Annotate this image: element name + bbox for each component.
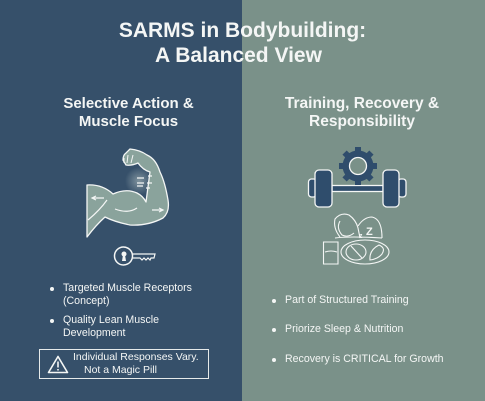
heading: left: Selective Action & [63,95,194,112]
bullet: lean muscle: Quality Lean Muscle [63,314,159,326]
title: A Balanced View [155,44,322,67]
bullet: receptors: Targeted Muscle Receptors [63,282,192,294]
icon: sleep and nutrition: z [359,233,363,240]
title [119,19,366,67]
icon: warning triangle [48,356,68,374]
bullet: sleep: Priorize Sleep & Nutrition [285,323,403,335]
bullet: receptors: (Concept) [63,295,110,307]
bullet: lean muscle [50,314,159,339]
icon: flexed arm [86,148,170,238]
callout: warning [39,349,209,379]
icon: key [114,246,156,266]
bullet list: right [272,294,444,365]
callout text: Not a Magic Pill [84,364,157,376]
heading: left: Muscle Focus [79,113,178,130]
panel: left background [0,0,242,401]
bullet list: left [50,282,192,339]
callout text [73,351,199,376]
heading: right [285,95,439,130]
title: SARMS in Bodybuilding: [119,19,366,42]
callout text: Individual Responses Vary. [73,351,199,363]
bullet: recovery: Recovery is CRITICAL for Growth [285,353,444,365]
icon: barbell with gear [308,147,407,208]
icon: sleep and nutrition [322,214,390,264]
heading: left [63,95,194,130]
icon: zzz: Z [366,226,373,238]
panel: right background [242,0,485,401]
heading: right: Responsibility [309,113,415,130]
heading: right: Training, Recovery & [285,95,439,112]
bullet: receptors [50,282,192,307]
bullet: lean muscle: Development [63,327,125,339]
bullet: training: Part of Structured Training [285,294,409,306]
